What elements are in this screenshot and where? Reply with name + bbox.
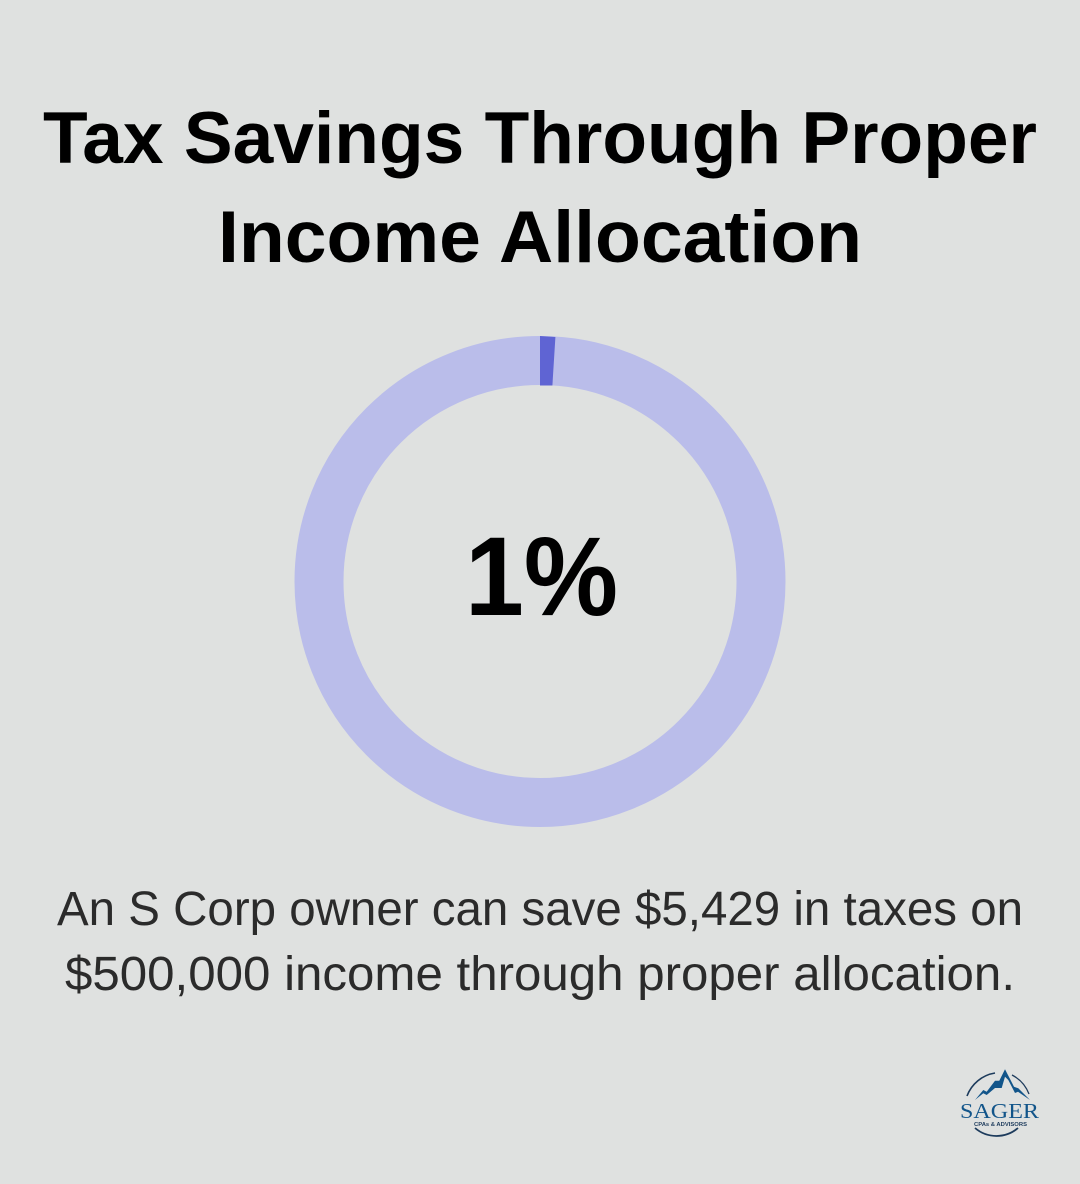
description text: An S Corp owner can save $5,429 in taxes on: [57, 883, 1023, 936]
logo ring arcs: [967, 1073, 995, 1096]
donut chart: 1%: [319, 336, 761, 802]
title: [43, 98, 1037, 278]
donut track: [319, 360, 761, 802]
title: Income Allocation: [218, 197, 862, 278]
logo mountain: [975, 1069, 1030, 1100]
logo tagline: CPAs & ADVISORS: [974, 1122, 1027, 1128]
donut highlighted 1% segment: [540, 336, 555, 386]
logo wordmark: SAGER: [960, 1099, 1039, 1123]
description text: $500,000 income through proper allocation.: [65, 948, 1015, 1001]
logo: Sager CPAs & Advisors: [960, 1069, 1039, 1136]
title: Tax Savings Through Proper: [43, 98, 1037, 179]
donut center value: 1%: [465, 514, 618, 639]
description text: [57, 883, 1023, 1001]
